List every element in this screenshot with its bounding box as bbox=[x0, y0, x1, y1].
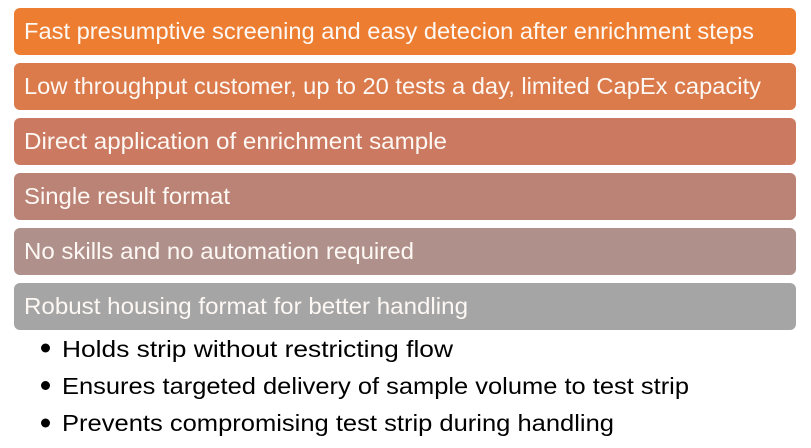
bar: no skills and no automation: No skills and no automation required bbox=[24, 238, 414, 264]
bullet: holds strip: Holds strip without restricting flow bbox=[62, 336, 453, 362]
bar: robust housing format bbox=[14, 283, 796, 330]
bar: no skills and no automation bbox=[14, 228, 796, 275]
bar: fast presumptive screening: Fast presumptive screening and easy detecion after enrichment steps bbox=[24, 18, 754, 44]
bar: robust housing format: Robust housing format for better handling bbox=[24, 293, 468, 319]
bar: low throughput customer bbox=[14, 63, 796, 110]
bullet: prevents compromising: Prevents compromising test strip during handling bbox=[62, 410, 614, 436]
bullet list: housing benefits bbox=[41, 336, 689, 436]
bar: direct application: Direct application of enrichment sample bbox=[24, 128, 447, 154]
bar: low throughput customer: Low throughput customer, up to 20 tests a day, limited CapEx capacity bbox=[24, 73, 762, 99]
bullet: ensures targeted delivery: Ensures targeted delivery of sample volume to test strip bbox=[62, 373, 689, 399]
bar: direct application bbox=[14, 118, 796, 165]
bar: single result format: Single result format bbox=[24, 183, 231, 209]
bar: fast presumptive screening bbox=[14, 8, 796, 55]
bar: single result format bbox=[14, 173, 796, 220]
